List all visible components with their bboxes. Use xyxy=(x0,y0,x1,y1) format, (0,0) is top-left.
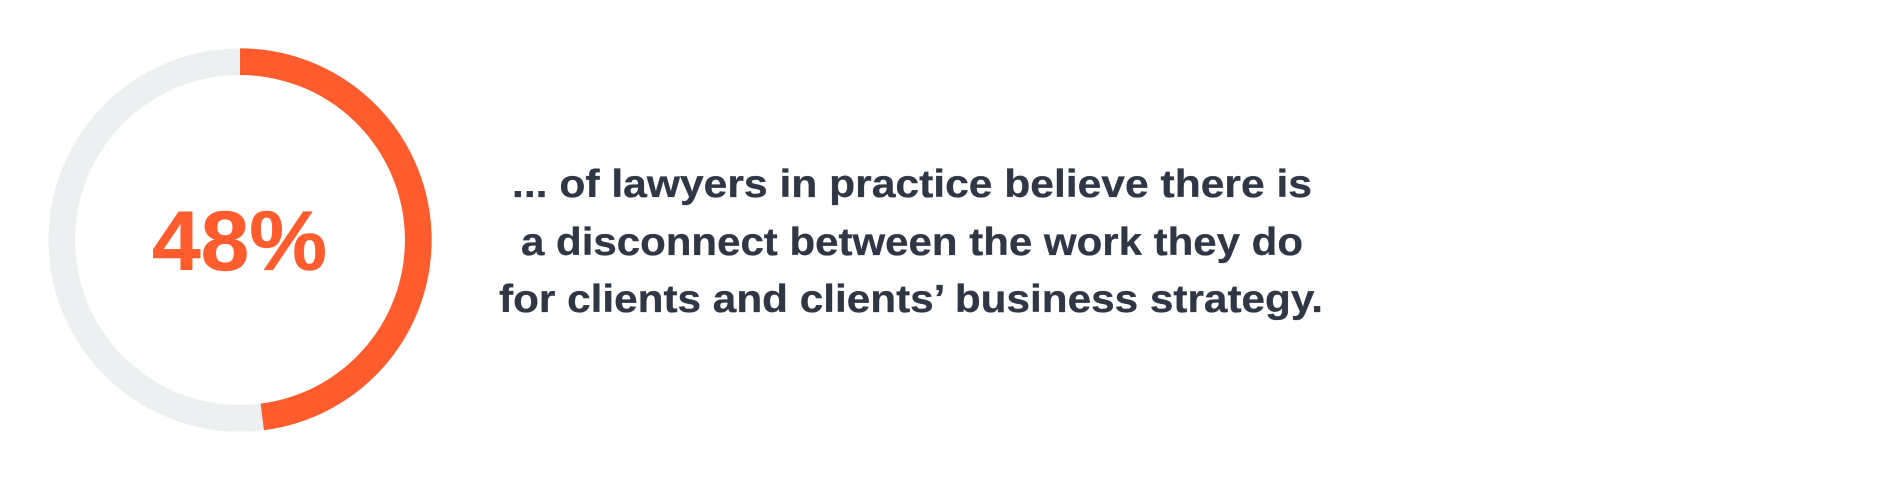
donut track xyxy=(62,62,418,418)
statement text xyxy=(499,163,1323,321)
donut chart: 48% xyxy=(62,62,418,418)
line 1: ... of lawyers in practice believe there is xyxy=(512,163,1312,206)
percentage value: 48% xyxy=(152,194,327,288)
donut value arc xyxy=(240,62,418,417)
line 3: for clients and clients’ business strategy. xyxy=(499,278,1323,321)
line 2: a disconnect between the work they do xyxy=(521,221,1303,264)
